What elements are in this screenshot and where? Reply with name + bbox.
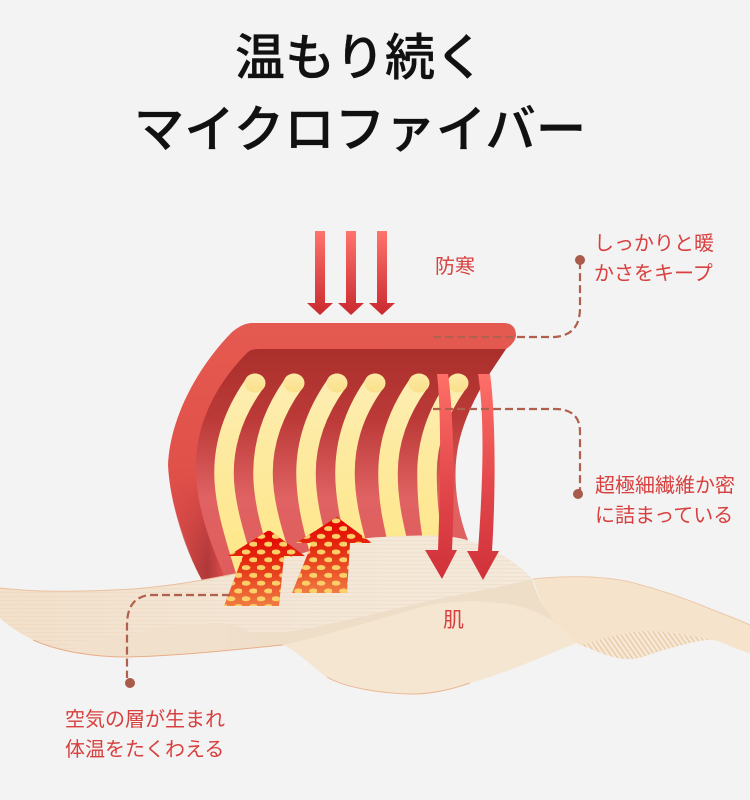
title: マイクロファイバー [134, 101, 586, 158]
warm arrow 1 [224, 530, 305, 606]
fabric: lower left shading [170, 489, 220, 580]
label: keeps warmth [594, 232, 714, 285]
label: dense microfiber: に詰まっている [595, 504, 733, 527]
label: air layer [65, 708, 225, 761]
fibers [224, 383, 458, 585]
label: keeps warmth: しっかりと暖 [594, 232, 714, 255]
fabric: outer band [168, 323, 516, 582]
warm arrow 2 [292, 517, 372, 593]
leader line: bottom left [127, 595, 230, 678]
fiber tips [244, 374, 468, 392]
leader line: top right [433, 262, 580, 337]
leader dot: bottom left [125, 678, 135, 688]
label: keeps warmth: かさをキープ [594, 263, 713, 285]
label: dense microfiber [595, 474, 735, 527]
leader dot: top right [575, 255, 585, 265]
cold arrows pointing down [307, 231, 395, 315]
label: skin: 肌 [443, 609, 464, 632]
title: 温もり続く [235, 30, 485, 86]
leader line: middle right [433, 409, 580, 492]
label: dense microfiber: 超極細繊維か密 [595, 474, 735, 497]
label: air layer: 体温をたくわえる [65, 738, 224, 761]
fabric: inner dark area [196, 349, 506, 580]
title [134, 30, 586, 158]
label: air layer: 空気の層が生まれ [65, 708, 225, 731]
heat arrows going down [425, 374, 499, 580]
skin wave [0, 536, 750, 694]
leader dot: middle right [573, 489, 583, 499]
label: cold protection: 防寒 [435, 255, 475, 278]
